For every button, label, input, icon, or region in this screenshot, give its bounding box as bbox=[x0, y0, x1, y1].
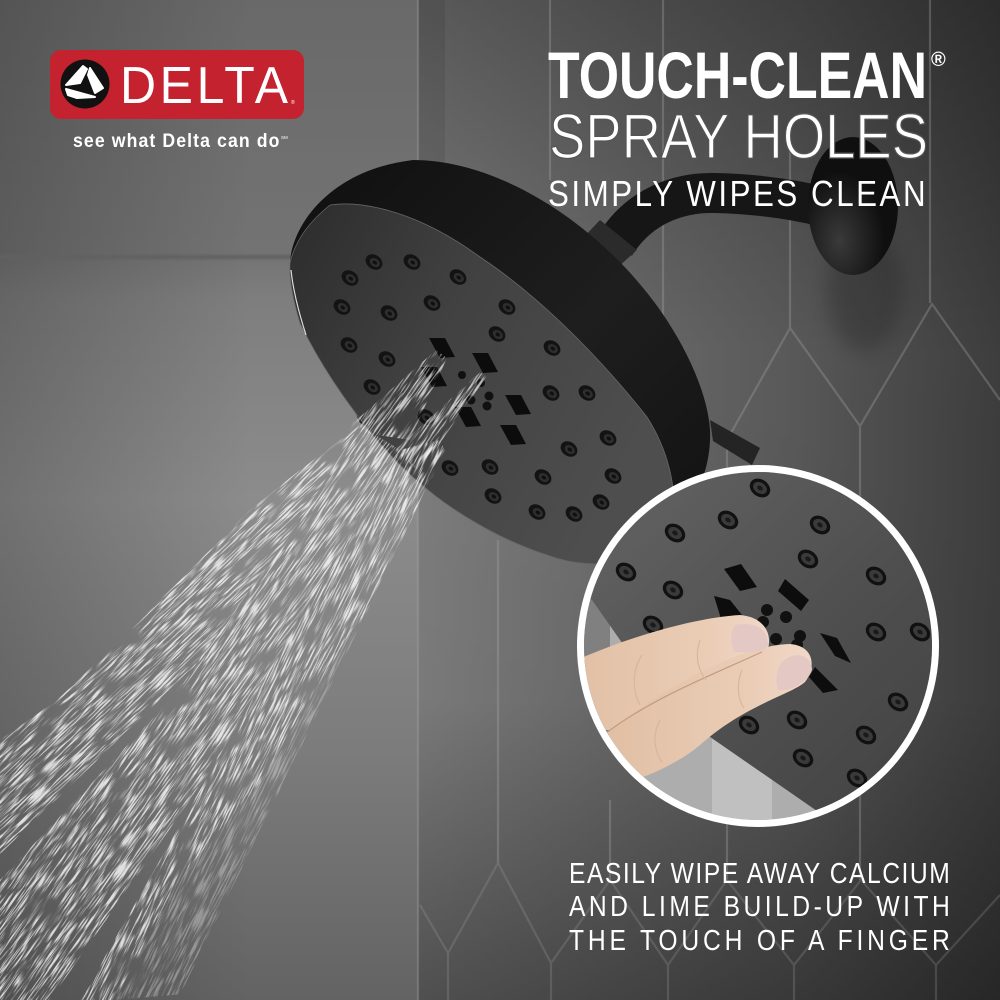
head body side bbox=[290, 160, 710, 565]
rim highlight bbox=[291, 270, 306, 335]
threaded fitting bbox=[583, 220, 637, 268]
caption: AND LIME BUILD-UP WITH bbox=[569, 890, 950, 922]
spray holes bbox=[331, 251, 624, 525]
nozzle jets bbox=[345, 350, 530, 525]
shower head bbox=[290, 160, 710, 565]
caption bbox=[569, 857, 950, 956]
background: tile grout lines bbox=[418, 0, 1000, 1000]
logo: Delta bbox=[50, 50, 304, 151]
logo: Delta: SM bbox=[281, 135, 288, 140]
caption: THE TOUCH OF A FINGER bbox=[569, 924, 950, 956]
water spray bbox=[0, 350, 530, 1000]
tagline: simply wipes clean: SIMPLY WIPES CLEAN bbox=[548, 174, 926, 215]
logo wordmark: DELTA bbox=[120, 56, 288, 114]
inset holes bbox=[612, 475, 934, 791]
logo emblem bbox=[60, 60, 110, 108]
flange shadow bbox=[827, 228, 903, 352]
shower arm bbox=[583, 137, 898, 275]
wall flange bbox=[808, 137, 898, 275]
title bbox=[548, 38, 946, 215]
title: ® bbox=[931, 49, 946, 71]
caption: EASILY WIPE AWAY CALCIUM bbox=[569, 857, 950, 889]
inset circle: finger wiping holes bbox=[570, 450, 950, 830]
tagline: see what Delta can do bbox=[73, 129, 279, 151]
fingers bbox=[570, 615, 812, 778]
fingernails bbox=[731, 624, 768, 652]
handle pin bbox=[710, 420, 760, 465]
head spray face bbox=[290, 204, 674, 564]
logo: Delta: ® bbox=[291, 99, 295, 106]
subtitle: spray holes: SPRAY HOLES bbox=[549, 102, 928, 172]
